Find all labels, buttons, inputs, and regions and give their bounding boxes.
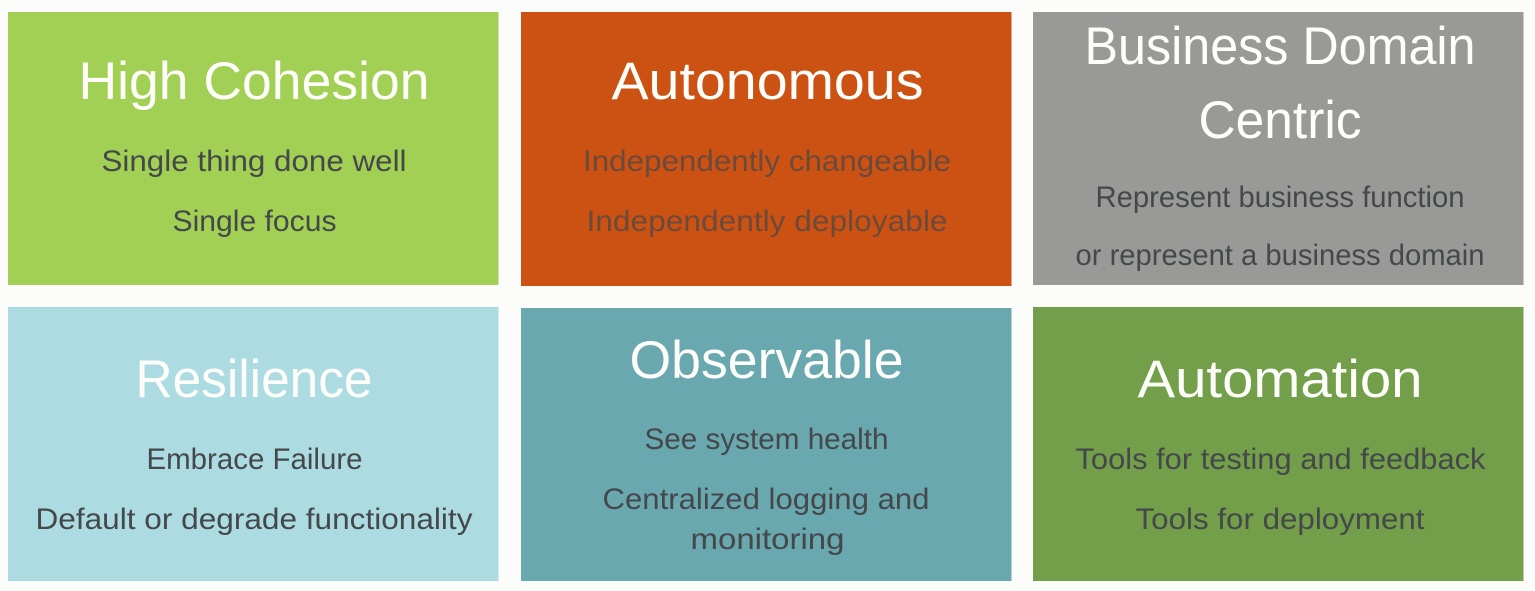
text: Tools for deployment: Tools for deployment bbox=[1136, 503, 1425, 536]
heading: Centric: Centric bbox=[1198, 91, 1362, 150]
panel: Observable bbox=[521, 308, 1012, 581]
heading: Automation: Automation bbox=[1138, 350, 1422, 409]
text: or represent a business domain: or represent a business domain bbox=[1076, 239, 1484, 272]
text: Single thing done well: Single thing done well bbox=[102, 145, 406, 178]
text: Independently changeable: Independently changeable bbox=[583, 145, 951, 178]
panel: Business Domain Centric bbox=[1033, 12, 1524, 285]
heading: Business Domain: Business Domain bbox=[1084, 17, 1476, 76]
text: monitoring: monitoring bbox=[690, 523, 844, 556]
heading: Observable: Observable bbox=[630, 331, 904, 390]
panel: Resilience bbox=[8, 307, 498, 581]
text: Single focus: Single focus bbox=[172, 205, 336, 238]
text: Default or degrade functionality: Default or degrade functionality bbox=[36, 503, 472, 536]
text: Centralized logging and: Centralized logging and bbox=[602, 483, 930, 516]
text: Embrace Failure: Embrace Failure bbox=[146, 443, 362, 476]
panel: High Cohesion bbox=[8, 12, 498, 285]
text: See system health: See system health bbox=[644, 423, 888, 456]
text: Tools for testing and feedback: Tools for testing and feedback bbox=[1076, 443, 1487, 476]
heading: Resilience: Resilience bbox=[136, 350, 372, 409]
heading: Autonomous: Autonomous bbox=[612, 52, 924, 111]
panel: Automation bbox=[1033, 307, 1524, 581]
text: Represent business function: Represent business function bbox=[1096, 181, 1464, 214]
panel: Autonomous bbox=[521, 12, 1012, 286]
text: Independently deployable: Independently deployable bbox=[586, 205, 948, 238]
heading: High Cohesion: High Cohesion bbox=[78, 52, 430, 111]
